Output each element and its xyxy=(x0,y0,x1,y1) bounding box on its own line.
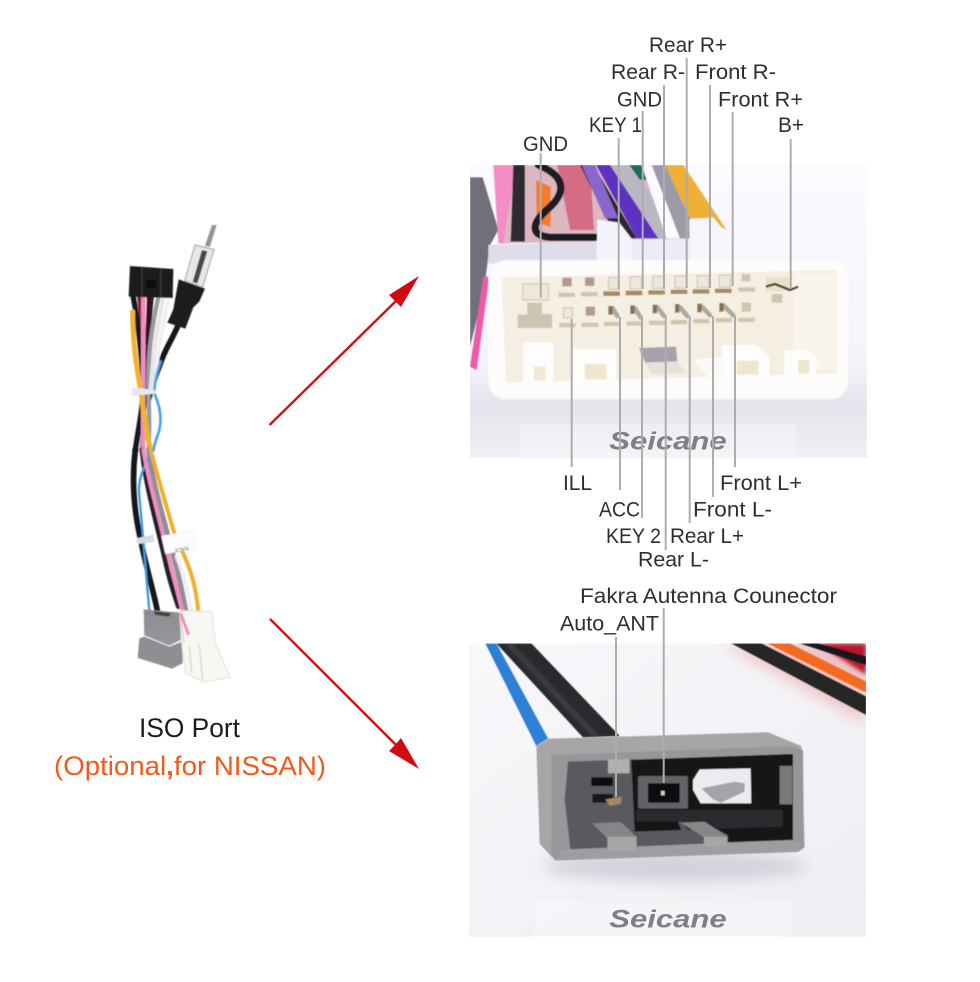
grey wire xyxy=(148,297,158,450)
black wire lower xyxy=(134,450,157,611)
photo background xyxy=(470,266,867,458)
bottom tab right xyxy=(681,822,727,837)
purple wire 1 xyxy=(582,165,618,218)
center slot lower xyxy=(645,361,686,374)
wires and connector xyxy=(470,165,848,399)
lower pin heads xyxy=(608,303,724,315)
center slot xyxy=(639,347,677,363)
wire label tag: BACK xyxy=(173,545,189,553)
pin labels: top: B+ xyxy=(778,114,804,137)
grey connector bottom xyxy=(138,637,183,669)
panel: harness photo xyxy=(129,225,230,682)
top row cavities xyxy=(562,277,595,316)
pin labels: top: Rear R- xyxy=(611,61,685,84)
lower pins xyxy=(613,306,733,317)
pin labels: bottom: Front L- xyxy=(693,499,772,522)
antenna metal barrel xyxy=(185,245,214,287)
caption: ISO Port: ISO Port xyxy=(139,713,241,743)
pin labels: bottom: Rear L- xyxy=(638,549,709,572)
pin labels: top xyxy=(523,34,804,156)
pink wire lower left xyxy=(470,277,489,370)
connector top tab right xyxy=(688,216,724,241)
grey wire 1 xyxy=(610,165,666,239)
watermark strip xyxy=(535,902,791,937)
white connector shading xyxy=(180,613,203,680)
purple wire 2 xyxy=(596,165,662,238)
white wire 2 xyxy=(154,297,169,390)
bottom tab left xyxy=(592,822,636,838)
pin labels: top: KEY 1 xyxy=(589,114,642,137)
antenna pin xyxy=(205,225,217,247)
Fakra inner xyxy=(648,783,680,803)
connector translucent top xyxy=(488,242,597,263)
orange wire xyxy=(536,180,551,227)
blue wire lower xyxy=(139,450,153,609)
white wire lower xyxy=(177,557,192,612)
connector face recess xyxy=(502,270,837,383)
harness lower half xyxy=(134,450,230,682)
red background blur xyxy=(721,643,866,723)
arrow: to antenna connector xyxy=(270,619,419,769)
connector front rim xyxy=(551,746,804,860)
black connector latch xyxy=(146,280,156,288)
top small tab xyxy=(608,759,630,773)
photo shadow xyxy=(541,852,808,882)
yellow wire xyxy=(665,165,727,230)
panel: harness connector photo xyxy=(470,165,867,458)
light slots xyxy=(558,274,782,327)
black connector ribs xyxy=(142,267,161,297)
pin labels: bottom: KEY 2 xyxy=(606,525,661,548)
black wire xyxy=(496,643,620,737)
pin labels: bottom: Rear L+ xyxy=(670,525,744,548)
connector body xyxy=(488,260,848,399)
red wire xyxy=(557,165,594,230)
bottom latch blocks xyxy=(523,343,817,383)
left keyed cutout xyxy=(518,303,552,328)
pin labels: top: Front R- xyxy=(695,61,776,84)
left slots xyxy=(591,777,613,786)
blue wire xyxy=(153,362,161,450)
dark wire xyxy=(511,165,525,242)
connector shell xyxy=(536,732,805,861)
connector right glow xyxy=(793,273,835,370)
white connector xyxy=(179,611,230,682)
pink wire xyxy=(493,165,516,243)
pin labels: top: Rear R+ xyxy=(649,34,727,57)
leader lines: top pins xyxy=(541,58,791,298)
red wire top right xyxy=(818,643,866,675)
antenna black boot xyxy=(167,279,205,329)
caption: optional for Nissan: (Optional,for NISSAN) xyxy=(54,751,326,781)
photo background xyxy=(469,643,866,937)
dark red wire 2 xyxy=(147,297,149,343)
top row pin slots xyxy=(603,289,732,296)
grey connector top xyxy=(144,609,181,646)
B+ terminal xyxy=(766,277,798,291)
harness upper half xyxy=(129,225,217,450)
pink wire lower xyxy=(143,450,189,635)
pin labels: top: Front R+ xyxy=(718,88,803,112)
watermark strip xyxy=(520,424,797,458)
pin labels: top: GND xyxy=(523,133,568,156)
orange wire top right xyxy=(767,643,866,693)
black connector xyxy=(129,266,173,298)
upper pins xyxy=(523,275,731,318)
pin labels: bottom: ILL xyxy=(563,472,592,495)
dark red wire xyxy=(139,297,143,337)
bottom lip xyxy=(555,840,801,860)
grey connector opening xyxy=(154,611,171,617)
bottom tab right front xyxy=(704,837,727,847)
pink wire xyxy=(136,297,150,450)
blue wire xyxy=(485,643,548,746)
antenna barrel core xyxy=(193,250,207,283)
see-through window xyxy=(693,768,751,803)
dark wire center xyxy=(580,165,637,238)
back black wire lower xyxy=(142,450,178,607)
white wire xyxy=(151,297,163,390)
back black wire xyxy=(142,297,152,450)
window interior strip xyxy=(701,782,745,803)
label: Auto_ANT: Auto_ANT xyxy=(560,613,659,636)
black wire top right xyxy=(731,643,866,715)
pin labels: bottom: Front L+ xyxy=(720,472,802,495)
bottom tab left front xyxy=(607,837,637,851)
pin labels: bottom: ACC xyxy=(599,499,640,522)
yellow wire lower xyxy=(151,450,198,613)
connector dark interior xyxy=(631,754,793,842)
right cavity notch xyxy=(780,766,792,804)
pink wire tip over connector xyxy=(181,613,189,635)
connector top tab left xyxy=(596,219,633,242)
arrow: to connector pinout xyxy=(270,276,419,425)
Fakra pin xyxy=(661,791,665,795)
black wire loop xyxy=(535,165,595,237)
mauve wire background xyxy=(503,165,700,243)
watermark: Seicane: Seicane xyxy=(609,427,727,455)
black wire far right xyxy=(800,643,866,665)
connector top center xyxy=(632,238,690,260)
leader lines: antenna connector xyxy=(616,608,664,797)
yellow wire xyxy=(133,312,151,450)
auto antenna pin xyxy=(605,797,622,806)
black wire xyxy=(133,297,143,450)
watermark: Seicane: Seicane xyxy=(609,905,727,933)
black wire highlight xyxy=(508,643,596,737)
auto antenna pin slot xyxy=(592,794,613,803)
leader lines: bottom pins xyxy=(572,316,735,550)
grey wire 2 xyxy=(651,165,692,239)
grey connector xyxy=(536,732,805,861)
white wire xyxy=(642,165,685,238)
green wire xyxy=(629,165,647,180)
label: Fakra antenna connector: Fakra Autenna Counector xyxy=(580,585,837,608)
pin labels: top: GND xyxy=(617,88,662,112)
antenna cable xyxy=(148,325,178,400)
panel: antenna connector photo xyxy=(469,643,866,937)
Fakra housing xyxy=(638,776,688,809)
interior lower band xyxy=(636,810,783,830)
connector cavity xyxy=(565,754,793,849)
zip tie xyxy=(132,388,157,395)
zip tie lower xyxy=(136,535,154,544)
grey block left xyxy=(470,177,498,347)
pin labels: bottom xyxy=(563,472,802,572)
wire label tag xyxy=(161,530,197,554)
grey wire lower xyxy=(149,450,186,612)
